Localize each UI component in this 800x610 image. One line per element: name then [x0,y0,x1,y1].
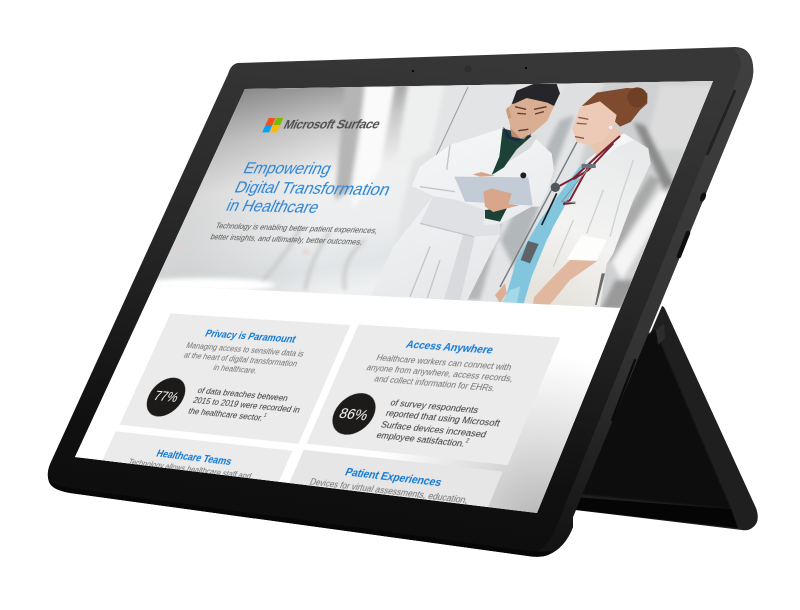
stethoscope [559,136,620,204]
hero photo of two doctors [154,81,713,308]
body text: in healthcare. [212,363,259,375]
brand logo [262,118,284,132]
scrubs [506,162,586,304]
panel: privacy is paramount [120,313,350,444]
face [572,101,617,145]
stat circle: 77% [151,388,181,405]
green sweater [492,128,532,175]
kickstand [560,306,758,530]
heading: Access Anywhere [404,339,495,357]
neck [592,124,622,156]
body text: and collect information for EHRs. [373,374,497,393]
microphone right [525,67,527,69]
lanyard [542,193,557,225]
tablet device illustration [48,47,758,557]
tablet body [48,47,753,557]
stat circle [140,376,192,418]
panel: healthcare teams [98,431,292,492]
panel: patient experiences [286,450,503,516]
connector slot [612,360,635,420]
forearm [533,260,597,307]
microphone left [412,70,414,72]
body text: at the heart of digital transformation [182,351,299,368]
infographic page on the screen [102,117,560,507]
body text: Devices for virtual assessments, education, [308,477,470,506]
stat circle [325,391,383,437]
body text: Managing access to sensitive data is [185,341,306,359]
stat text: employee satisfaction.2 [375,429,470,449]
ID badge [521,241,539,263]
heading: Healthcare Teams [154,448,233,468]
speaker slot [707,90,735,155]
subtitle: Technology is enabling better patient experiences, better insights, and ultimately, better outcomes. [209,222,379,246]
body text [182,341,306,375]
body text: anyone from anywhere, access records, [365,363,515,384]
stat text: of data breaches between [196,385,290,403]
collar [503,127,532,142]
stat text: Surface devices increased [379,418,489,439]
facial features [515,107,547,131]
neck [510,126,528,140]
stat circle: 86% [337,404,371,424]
right edge strip [530,49,753,556]
male doctor [387,84,560,300]
tablet in hand [454,177,533,206]
brand name: Microsoft Surface [282,117,382,131]
body text: Healthcare workers can connect with [375,353,513,373]
body text: Technology allows healthcare staff and [127,458,253,481]
hands [483,188,519,212]
title: Empowering Digital Transformation in Healthcare [223,159,394,217]
facial features [575,117,588,138]
USB-C port [679,233,688,256]
female doctor [495,87,651,307]
lab coat [525,133,651,307]
screen background [75,81,713,513]
stat text: the healthcare sector.1 [187,405,268,422]
panel: access anywhere [307,325,560,465]
hair [512,84,560,106]
stat text: of survey respondents [389,397,481,415]
body text [365,353,515,393]
bottom lip [49,480,552,557]
stat text: 2015 to 2019 were recorded in [191,395,302,415]
hair [582,88,647,127]
lab coat [387,128,554,300]
headphone jack [699,191,707,203]
stat text [187,385,302,422]
photo backdrop [154,81,713,308]
stat text [375,397,502,449]
heading: Privacy is Paramount [203,329,297,346]
heading: Patient Experiences [343,467,443,490]
face [507,97,555,139]
stat text: reported that using Microsoft [384,408,502,429]
webcam [464,65,472,73]
